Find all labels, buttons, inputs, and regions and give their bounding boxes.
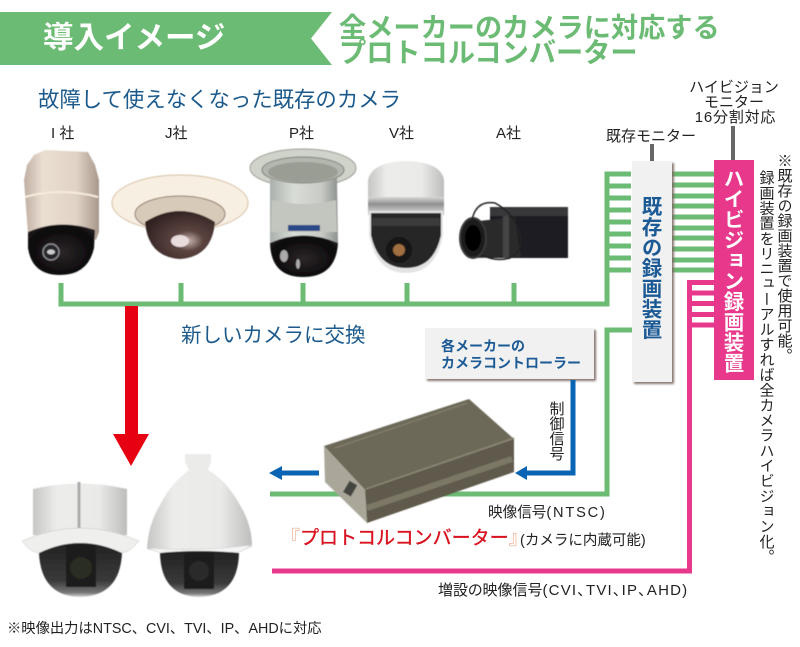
- label: hi-vision monitor: ハイビジョン: [689, 79, 779, 96]
- header band: 導入イメージ: 導入イメージ: [43, 21, 225, 55]
- subheading: broken cameras: 故障して使えなくなった既存のカメラ: [38, 88, 401, 112]
- box: existing recorder: [632, 161, 672, 382]
- label: hi-vision monitor: モニター: [704, 94, 764, 111]
- label: control signal: 制御信号: [546, 401, 568, 462]
- heading: protocol converter: 全メーカーのカメラに対応する: [339, 12, 720, 43]
- subheading: replace camera: 新しいカメラに交換: [181, 324, 366, 347]
- maker labels: A社: [496, 125, 521, 142]
- label: protocol converter: 『プロトコルコンバーター』: [281, 527, 528, 549]
- pink signal line: [272, 282, 714, 571]
- label: additional video signal: 増設の映像信号(CVI、TVI、IP、AHD): [438, 582, 688, 599]
- red arrow: [113, 306, 149, 466]
- note: vertical: [756, 153, 796, 564]
- header band: 導入イメージ: [0, 12, 332, 65]
- monitor connector lines: [652, 126, 733, 161]
- box: camera controller: [425, 328, 594, 379]
- camera: P: [250, 149, 356, 277]
- camera: V: [368, 161, 444, 273]
- camera: A: [460, 203, 568, 259]
- label: hi-vision monitor: [689, 79, 779, 126]
- maker labels: [51, 125, 521, 142]
- heading: protocol converter: [339, 12, 720, 68]
- label: existing monitor: 既存モニター: [606, 128, 696, 145]
- heading: protocol converter: プロトコルコンバーター: [339, 37, 638, 68]
- box: existing recorder: 既存の録画装置: [637, 196, 667, 340]
- note: vertical: 録画装置をリニューアルすれば全カメラハイビジョン化。: [756, 170, 778, 564]
- box: hi-vision recorder: ハイビジョン録画装置: [719, 168, 749, 373]
- device: protocol converter: [324, 399, 514, 523]
- camera: new ceiling dome: [22, 482, 139, 597]
- blue control line arrow: [515, 380, 573, 480]
- green camera bus line: [61, 174, 714, 304]
- green video signal line: [270, 330, 632, 494]
- camera: J: [112, 175, 248, 259]
- blue arrow to cameras: [269, 466, 319, 480]
- maker labels: P社: [289, 125, 314, 142]
- label: video signal NTSC: 映像信号(NTSC): [488, 504, 607, 521]
- box: hi-vision recorder: [714, 160, 754, 380]
- note: vertical: ※既存の録画装置で使用可能。: [774, 153, 796, 363]
- box: camera controller: 各メーカーの: [441, 338, 525, 354]
- maker labels: V社: [389, 125, 414, 142]
- box: camera controller: カメラコントローラー: [441, 355, 581, 371]
- camera: I: [24, 150, 99, 275]
- maker labels: J社: [165, 125, 188, 142]
- maker labels: I 社: [51, 125, 74, 142]
- footnote: ※映像出力はNTSC、CVI、TVI、IP、AHDに対応: [7, 620, 322, 637]
- label: built-in: (カメラに内蔵可能): [520, 532, 646, 549]
- camera: new pendant dome: [147, 454, 252, 597]
- label: hi-vision monitor: 16分割対応: [695, 109, 776, 126]
